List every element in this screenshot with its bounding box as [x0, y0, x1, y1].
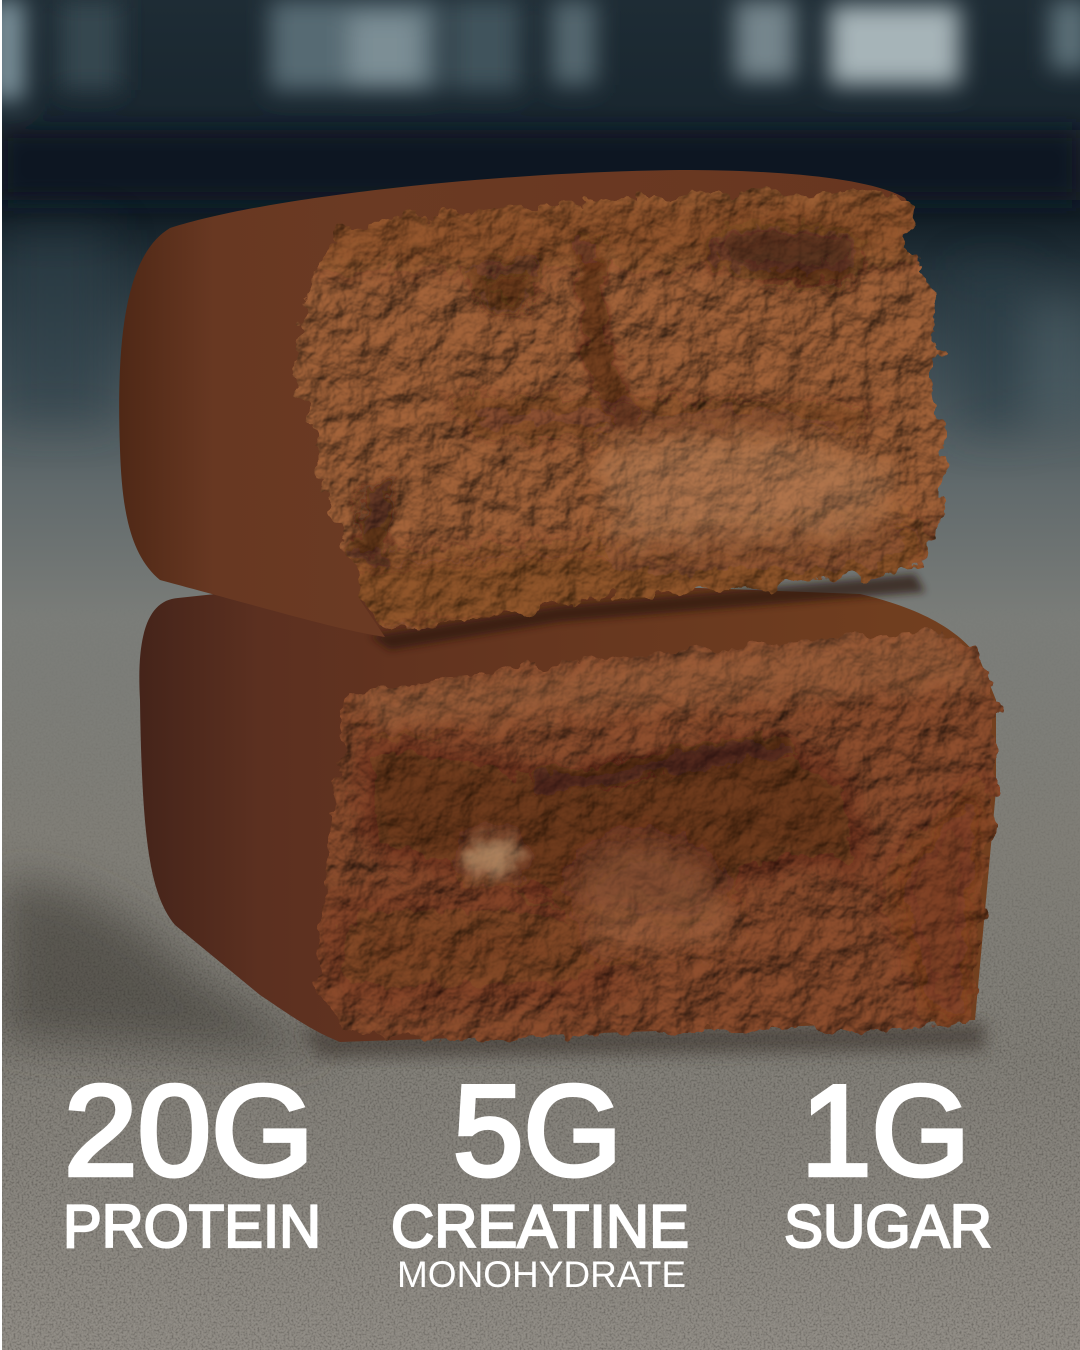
- bottom protein bar: [139, 585, 1020, 1060]
- value: 20G: 20G: [64, 1059, 314, 1203]
- label: creatine: CREATINE: [391, 1193, 689, 1260]
- stats: 5G creatine monohydrate: [391, 1059, 689, 1295]
- stats: 1G sugar: [784, 1059, 992, 1260]
- label: sugar: SUGAR: [784, 1193, 992, 1260]
- label: monohydrate: MONOHYDRATE: [397, 1254, 686, 1295]
- label: protein: PROTEIN: [63, 1193, 321, 1260]
- top bar cut face: [292, 186, 950, 630]
- top protein bar: [119, 170, 970, 660]
- bottom bar cut face: [312, 627, 1004, 1042]
- left edge strip: [0, 0, 2, 1350]
- floor speckle: [2, 782, 1080, 1350]
- top bar side: [119, 170, 912, 637]
- stats: 20G protein: [63, 1059, 321, 1260]
- value: 5G: 5G: [453, 1059, 622, 1203]
- blurred windows: [0, 0, 1080, 200]
- floor shadow: [0, 880, 330, 1055]
- bottom bar side: [139, 585, 996, 1042]
- contact shadow: [370, 574, 925, 650]
- value: 1G: 1G: [801, 1059, 970, 1203]
- floor reflections: [0, 230, 1080, 430]
